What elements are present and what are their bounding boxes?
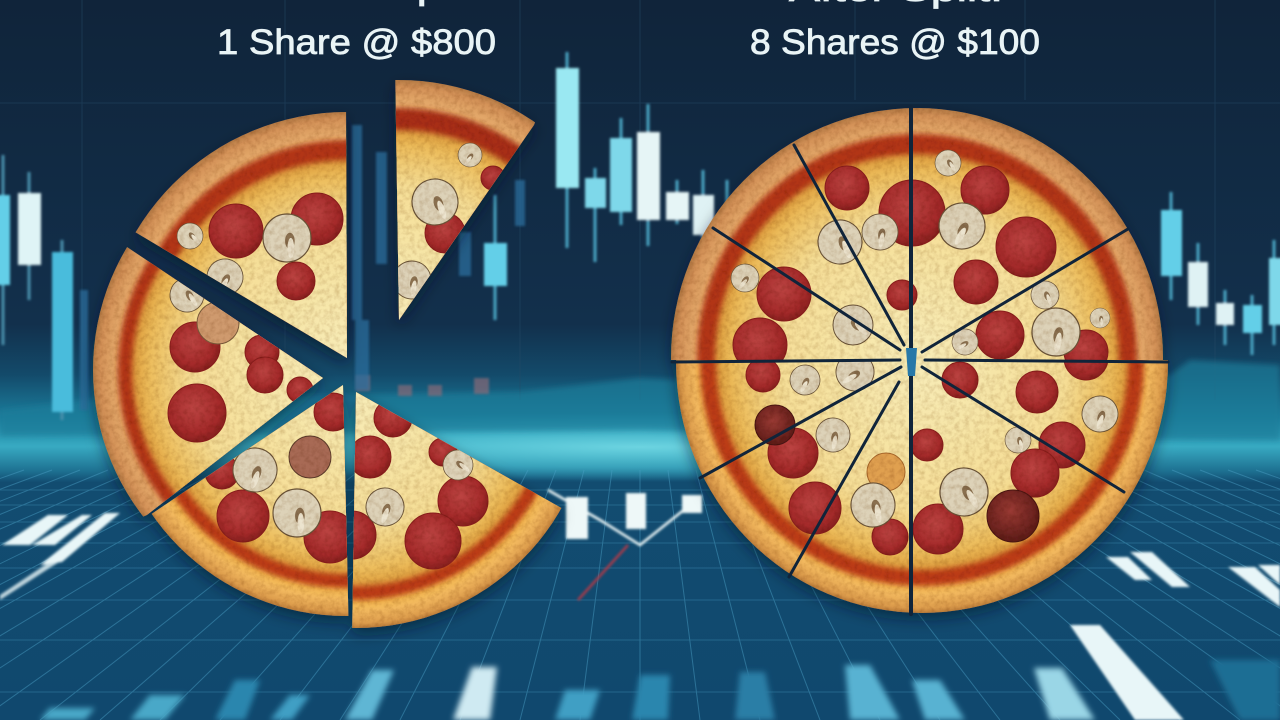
right pizza: same pie cut into more slices (671, 108, 1168, 613)
slice: top right detached (392, 80, 535, 320)
candlesticks: right group (1161, 192, 1280, 355)
right pizza: centre hole (906, 348, 917, 376)
background: horizon glow (80, 413, 1200, 481)
background: faint rear candlesticks (80, 125, 525, 410)
floor: left white bars (0, 513, 120, 600)
floor: blurred foreground bars (40, 660, 1280, 720)
background: teal skyline chart (0, 360, 1280, 440)
pizza half: upper (666, 108, 1168, 370)
slice: top left (136, 112, 355, 364)
slice: left (84, 247, 326, 528)
floor: white candlesticks and line chart (548, 490, 702, 600)
candlesticks: centre group (484, 52, 727, 320)
right pizza: slice cut lines (672, 107, 1168, 614)
label: 1 share at 800: 1 Share @ $800 (217, 23, 496, 62)
slice: bottom right (346, 392, 568, 641)
candlesticks: left group (0, 155, 73, 420)
background: faint sky grid lines (0, 0, 1280, 400)
left pizza: one whole share cut into five visible slices (93, 80, 639, 628)
label: 8 shares at 100: 8 Shares @ $100 (750, 23, 1040, 62)
pizza half: lower (668, 360, 1176, 627)
floor: perspective grid (0, 470, 1280, 720)
floor: right white bars (1070, 552, 1280, 720)
slice: bottom left (148, 385, 354, 629)
background: pink horizon squares (356, 375, 489, 396)
